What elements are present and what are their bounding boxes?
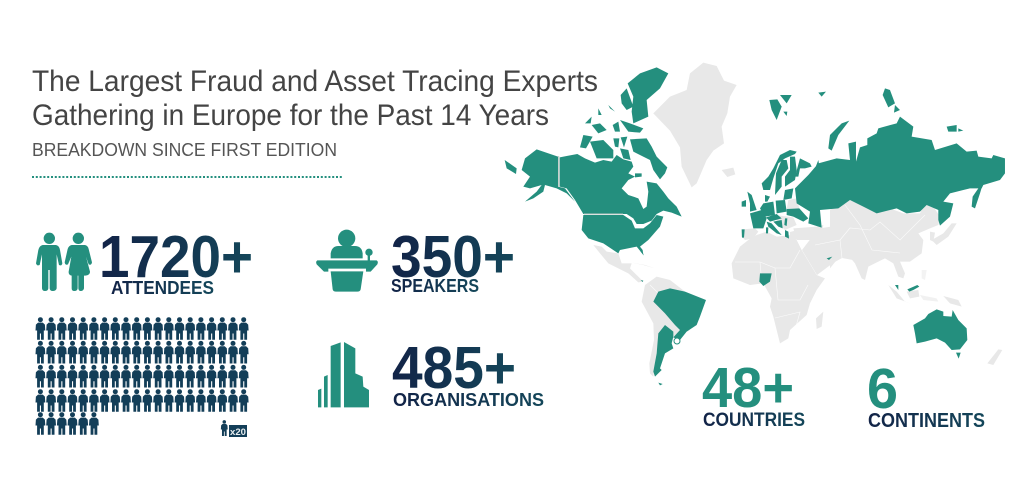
stat: countries xyxy=(702,356,805,431)
South America teal xyxy=(640,247,706,385)
number 485+: 485+ xyxy=(392,335,516,401)
UAE xyxy=(827,257,832,260)
Florida xyxy=(640,247,643,255)
stat: continents xyxy=(867,357,985,432)
Norway xyxy=(762,150,797,190)
title: Gathering in Europe for the Past 14 Years xyxy=(32,99,549,132)
Poland xyxy=(776,200,787,213)
number 1720+: 1720+ xyxy=(99,224,253,290)
Iceland xyxy=(722,168,735,177)
Middle East xyxy=(790,205,870,275)
subtitle: BREAKDOWN SINCE FIRST EDITION xyxy=(32,140,337,160)
Italy xyxy=(767,222,782,235)
stat: attendees xyxy=(99,224,253,298)
France xyxy=(750,210,767,228)
pictogram grid of attendees xyxy=(36,317,249,435)
Brazil xyxy=(653,288,706,340)
Greenland xyxy=(653,63,737,187)
number 6: 6 xyxy=(867,357,898,421)
Kola peninsula xyxy=(795,158,812,177)
label: CONTINENTS xyxy=(868,410,985,432)
dotted divider xyxy=(32,176,343,178)
Portugal xyxy=(742,229,745,238)
pictogram legend x20: x20 xyxy=(230,427,246,437)
Australia and Malaysia xyxy=(895,285,967,359)
North America xyxy=(505,67,682,256)
label: ATTENDEES xyxy=(111,278,214,298)
Alaska xyxy=(522,149,575,202)
Europe xyxy=(742,150,808,239)
icon: man and woman xyxy=(36,233,92,291)
map: Canada border lines xyxy=(559,156,623,214)
Baltics xyxy=(783,188,793,200)
icon: speaker at podium xyxy=(316,230,378,292)
icon: office buildings xyxy=(318,342,369,407)
map: white country borders xyxy=(650,205,925,330)
Argentina xyxy=(653,325,673,377)
Europe grey backing xyxy=(742,198,823,240)
Japan, Indonesia, New Zealand xyxy=(888,223,1002,365)
number 350+: 350+ xyxy=(391,224,515,290)
title xyxy=(32,65,598,132)
number 48+: 48+ xyxy=(702,356,794,420)
Uruguay xyxy=(674,338,680,344)
Canada xyxy=(560,154,682,224)
Nigeria xyxy=(759,273,772,286)
Balkans xyxy=(773,220,783,228)
map: teal countries xyxy=(505,67,1005,385)
Madagascar xyxy=(816,312,823,329)
label: COUNTRIES xyxy=(703,410,805,431)
Denmark xyxy=(765,195,770,202)
world map xyxy=(505,63,1005,385)
Austria and Switzerland xyxy=(766,214,782,222)
stat: speakers xyxy=(391,224,515,296)
Arctic islands xyxy=(628,67,668,123)
Central and South America xyxy=(593,245,690,385)
Sweden xyxy=(775,160,788,195)
Greece xyxy=(785,230,789,239)
Ukraine xyxy=(787,208,808,222)
label: SPEAKERS xyxy=(391,276,479,296)
pictogram legend x20 xyxy=(221,420,247,437)
label: ORGANISATIONS xyxy=(393,390,544,410)
UK and Ireland xyxy=(747,192,757,212)
Finland xyxy=(785,157,797,187)
Sardinia xyxy=(766,227,768,233)
Asia xyxy=(830,200,940,280)
map: grey countries xyxy=(593,63,1002,385)
title: The Largest Fraud and Asset Tracing Experts xyxy=(32,65,598,98)
stat: organisations xyxy=(392,335,544,410)
USA xyxy=(582,215,663,256)
Africa xyxy=(732,232,825,343)
Germany and Benelux xyxy=(760,202,775,217)
Russia and Arctic xyxy=(769,88,1005,228)
